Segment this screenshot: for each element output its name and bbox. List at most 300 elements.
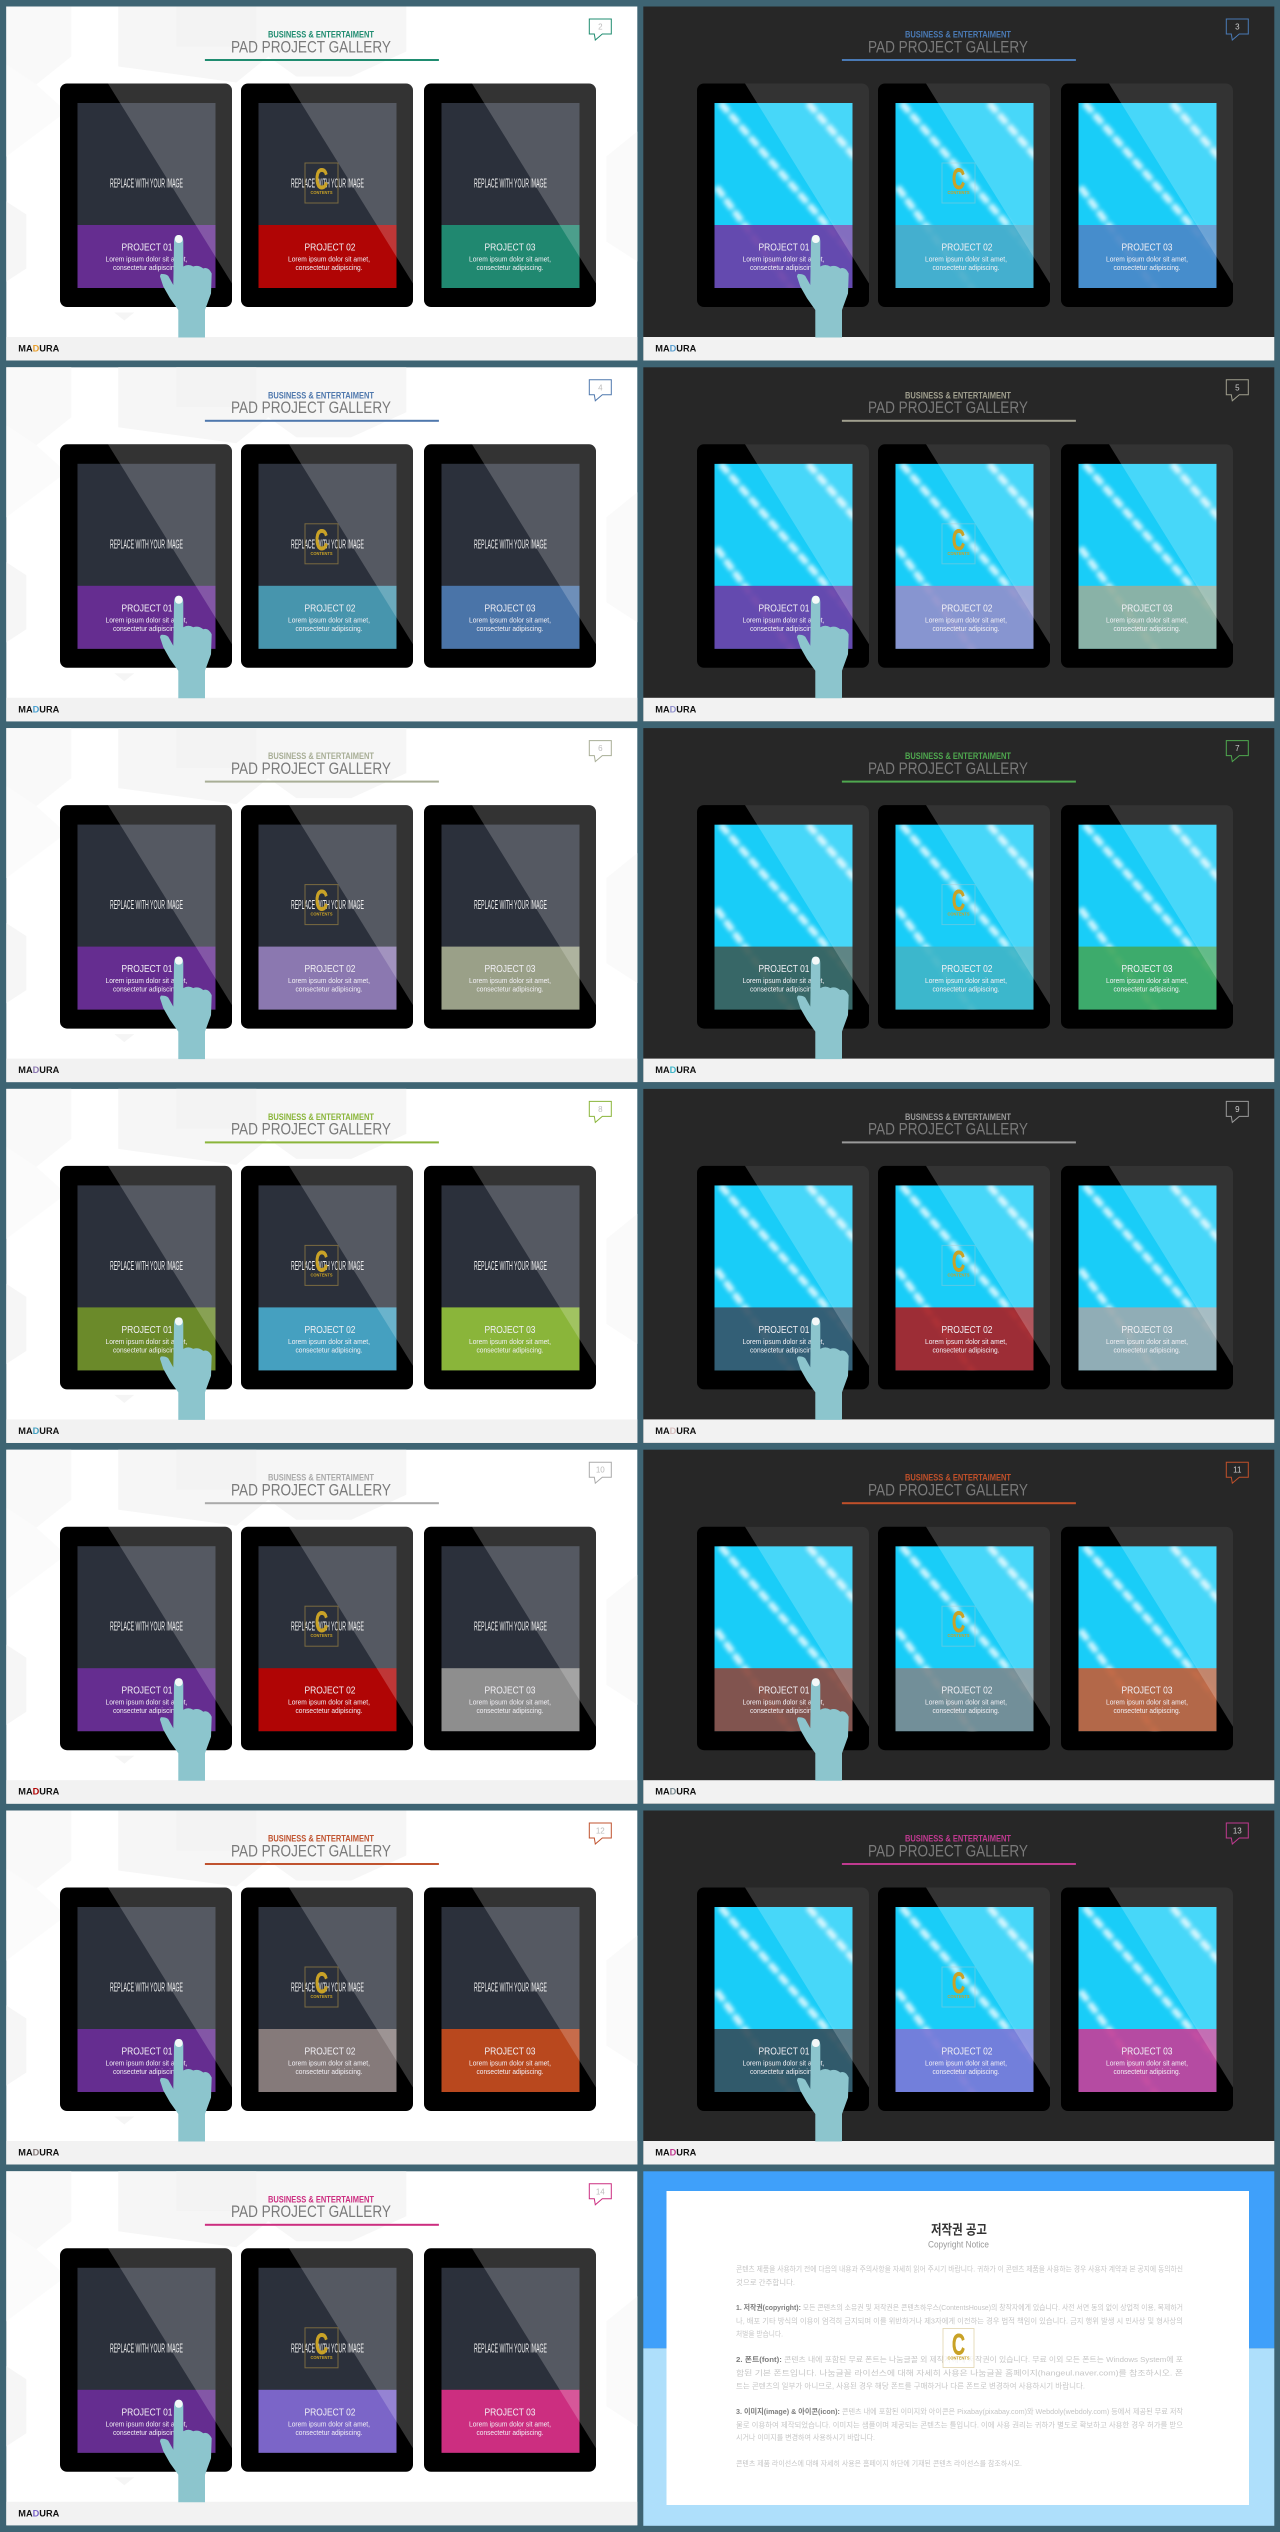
tablet: project 03: PROJECT 03 xyxy=(485,2046,536,2058)
icon: page number bubble xyxy=(589,19,611,40)
notice body text: 1. 저작권(copyright): 모든 콘텐츠의 소유권 및 저작권은 콘텐츠하우스(ContentsHouse)의 창작자에게 있습니다. 사전 서면 동의 없이 상업적 이용, 복제하거 xyxy=(736,2302,1183,2312)
tablet: project 01 xyxy=(697,1888,944,2111)
heading: PAD PROJECT GALLERY xyxy=(868,38,1028,56)
tablet: project 02: C xyxy=(952,1245,965,1278)
icon: page number bubble: 12 xyxy=(596,1826,605,1836)
tablet: project 02: CONTENTS xyxy=(947,912,969,917)
tablet: project 02: C xyxy=(315,2328,328,2361)
tablet: project 02: PROJECT 02 xyxy=(304,2046,356,2058)
tablet: project 01: REPLACE WITH YOUR IMAGE xyxy=(110,898,183,912)
heading: PAD PROJECT GALLERY xyxy=(231,399,391,417)
tablet: project 02: C xyxy=(315,524,328,557)
tablet: project 01: Lorem ipsum dolor sit amet, xyxy=(106,976,188,985)
tablet: project 02: Lorem ipsum dolor sit amet, xyxy=(925,976,1007,985)
tablet: project 02: CONTENTS xyxy=(310,1272,332,1277)
tablet: project 01: consectetur adipiscing. xyxy=(113,985,180,994)
tablet: project 03 xyxy=(424,805,596,1029)
tablet: project 02 xyxy=(241,2248,413,2472)
tablet: project 03: consectetur adipiscing. xyxy=(1114,1706,1180,1715)
tablet: project 02: C xyxy=(952,1967,965,2000)
footer logo: MADURA xyxy=(18,1426,59,1437)
tablet: project 03: PROJECT 03 xyxy=(1122,1685,1173,1697)
notice body text: 3. 이미지(image) & 아이콘(icon): 콘텐츠 내에 포함된 이미지와 아이콘은 Pixabay(pixabay.com)와 Webdoly(webdoly.com) 등에서 제공된 무료 저작 xyxy=(736,2406,1183,2416)
heading: PAD PROJECT GALLERY xyxy=(231,38,391,56)
tablet: project 02: Lorem ipsum dolor sit amet, xyxy=(288,615,370,624)
heading: BUSINESS & ENTERTAIMENT xyxy=(268,390,375,400)
heading xyxy=(842,390,1076,422)
tablet: project 03: Lorem ipsum dolor sit amet, xyxy=(469,615,551,624)
tablet: project 01: Lorem ipsum dolor sit amet, xyxy=(742,976,824,985)
tablet: project 02: Lorem ipsum dolor sit amet, xyxy=(288,2419,370,2428)
tablet: project 02: REPLACE WITH YOUR IMAGE xyxy=(291,1259,364,1273)
tablet: project 01: PROJECT 01 xyxy=(758,2046,810,2058)
tablet: project 02: consectetur adipiscing. xyxy=(932,985,999,994)
tablet: project 02: Lorem ipsum dolor sit amet, xyxy=(288,254,370,264)
tablet: project 03: Lorem ipsum dolor sit amet, xyxy=(469,1698,551,1707)
tablet: project 02: Lorem ipsum dolor sit amet, xyxy=(288,976,370,985)
tablet: project 02: C xyxy=(952,524,965,557)
heading: BUSINESS & ENTERTAIMENT xyxy=(905,1834,1012,1844)
tablet: project 02: PROJECT 02 xyxy=(941,1685,993,1697)
icon: page number bubble xyxy=(589,380,611,401)
icon: page number bubble xyxy=(1226,1462,1248,1483)
tablet: project 02: CONTENTS xyxy=(947,1994,969,1999)
tablet: project 01: REPLACE WITH YOUR IMAGE xyxy=(110,1259,183,1273)
tablet: project 02: PROJECT 02 xyxy=(304,963,356,975)
icon: hand xyxy=(797,1317,849,1420)
tablet: project 02: PROJECT 02 xyxy=(304,602,356,614)
tablet: project 02 xyxy=(241,1527,413,1750)
icon: hand xyxy=(797,1678,849,1781)
heading xyxy=(205,1834,439,1865)
notice card xyxy=(666,2191,1249,2505)
tablet: project 01: REPLACE WITH YOUR IMAGE xyxy=(110,1620,183,1634)
heading: BUSINESS & ENTERTAIMENT xyxy=(268,751,375,761)
tablet: project 01: consectetur adipiscing. xyxy=(113,263,180,272)
tablet: project 03: Lorem ipsum dolor sit amet, xyxy=(469,2419,551,2428)
heading: BUSINESS & ENTERTAIMENT xyxy=(268,1112,375,1122)
tablet: project 03: REPLACE WITH YOUR IMAGE xyxy=(474,1980,547,1994)
tablet: project 03: Lorem ipsum dolor sit amet, xyxy=(469,976,551,985)
tablet: project 02: PROJECT 02 xyxy=(304,242,356,254)
tablet: project 02 xyxy=(241,444,413,668)
icon: hand xyxy=(160,1317,212,1420)
heading: PAD PROJECT GALLERY xyxy=(231,2203,391,2221)
icon: page number bubble xyxy=(1226,380,1248,401)
icon: page number bubble xyxy=(1226,741,1248,762)
tablet: project 03: PROJECT 03 xyxy=(485,1685,536,1697)
tablet: project 02: consectetur adipiscing. xyxy=(295,1706,362,1715)
tablet: project 02: C xyxy=(952,885,965,918)
tablet: project 01: consectetur adipiscing. xyxy=(113,2067,180,2076)
tablet: project 01: consectetur adipiscing. xyxy=(750,263,817,272)
tablet: project 02: CONTENTS xyxy=(310,1633,332,1638)
tablet: project 03: consectetur adipiscing. xyxy=(1114,985,1180,994)
tablet: project 01: Lorem ipsum dolor sit amet, xyxy=(106,2058,188,2068)
tablet: project 02: consectetur adipiscing. xyxy=(295,2067,362,2076)
icon: page number bubble: 3 xyxy=(1235,22,1240,32)
heading: BUSINESS & ENTERTAIMENT xyxy=(905,1112,1012,1122)
tablet: project 01 xyxy=(697,444,944,668)
tablet: project 01: consectetur adipiscing. xyxy=(750,624,817,633)
tablet: project 02: CONTENTS xyxy=(310,551,332,556)
tablet: project 01 xyxy=(697,805,944,1029)
tablet: project 01: consectetur adipiscing. xyxy=(750,1345,817,1354)
footer logo: MADURA xyxy=(655,1426,696,1437)
tablet: project 03: consectetur adipiscing. xyxy=(477,624,544,633)
tablet: project 02: consectetur adipiscing. xyxy=(295,1345,362,1354)
tablet: project 02: CONTENTS xyxy=(947,1272,969,1277)
notice body text xyxy=(736,2264,1183,2468)
icon: page number bubble: 4 xyxy=(598,383,603,392)
tablet: project 01: PROJECT 01 xyxy=(758,242,810,254)
heading: PAD PROJECT GALLERY xyxy=(231,760,391,778)
tablet: project 02: REPLACE WITH YOUR IMAGE xyxy=(291,1620,364,1634)
tablet: project 02: REPLACE WITH YOUR IMAGE xyxy=(291,1980,364,1994)
tablet: project 01: Lorem ipsum dolor sit amet, xyxy=(106,1698,188,1707)
footer logo: MADURA xyxy=(18,1065,59,1076)
tablet: project 01: Lorem ipsum dolor sit amet, xyxy=(106,1337,188,1346)
tablet: project 03 xyxy=(1061,1527,1280,1750)
tablet: project 02 xyxy=(241,84,413,307)
tablet: project 03: Lorem ipsum dolor sit amet, xyxy=(1106,1337,1188,1346)
icon: page number bubble: 13 xyxy=(1233,1826,1242,1836)
tablet: project 02 xyxy=(878,1527,1126,1750)
heading xyxy=(205,2194,439,2226)
tablet: project 03: PROJECT 03 xyxy=(1122,2046,1173,2058)
tablet: project 01 xyxy=(60,1166,232,1389)
tablet: project 03: consectetur adipiscing. xyxy=(477,1345,544,1354)
tablet: project 03: PROJECT 03 xyxy=(485,1324,536,1336)
panel: slide 7 xyxy=(643,728,1280,1082)
tablet: project 02 xyxy=(878,444,1126,668)
tablet: project 03: REPLACE WITH YOUR IMAGE xyxy=(474,2341,547,2355)
panel: slide 12 xyxy=(6,1810,637,2164)
tablet: project 01: consectetur adipiscing. xyxy=(113,624,180,633)
notice body text: 것으로 간주합니다. xyxy=(736,2277,795,2287)
tablet: project 03: consectetur adipiscing. xyxy=(477,985,544,994)
tablet: project 02: consectetur adipiscing. xyxy=(932,2067,999,2076)
heading xyxy=(205,1112,439,1143)
heading: PAD PROJECT GALLERY xyxy=(868,1481,1028,1499)
heading: BUSINESS & ENTERTAIMENT xyxy=(905,390,1012,400)
tablet: project 03 xyxy=(424,2248,596,2472)
tablet: project 02 xyxy=(241,1888,413,2111)
tablet: project 03: REPLACE WITH YOUR IMAGE xyxy=(474,1259,547,1273)
heading: BUSINESS & ENTERTAIMENT xyxy=(268,1834,375,1844)
tablet: project 02: consectetur adipiscing. xyxy=(295,985,362,994)
icon: page number bubble xyxy=(589,1823,611,1844)
tablet: project 03: consectetur adipiscing. xyxy=(1114,2067,1180,2076)
tablet: project 02: C xyxy=(315,1245,328,1278)
heading: PAD PROJECT GALLERY xyxy=(868,1842,1028,1860)
tablet: project 02 xyxy=(878,805,1126,1029)
icon: hand xyxy=(160,957,212,1059)
tablet: project 02: consectetur adipiscing. xyxy=(295,263,362,272)
tablet: project 03: Lorem ipsum dolor sit amet, xyxy=(469,1337,551,1346)
icon: page number bubble: 6 xyxy=(598,744,603,753)
tablet: project 02: C xyxy=(952,163,965,196)
tablet: project 03: Lorem ipsum dolor sit amet, xyxy=(469,2058,551,2068)
logo: contents stamp xyxy=(943,2328,974,2368)
tablet: project 01: REPLACE WITH YOUR IMAGE xyxy=(110,176,183,190)
icon: hand xyxy=(160,1678,212,1781)
footer logo: MADURA xyxy=(655,1065,696,1076)
tablet: project 01: Lorem ipsum dolor sit amet, xyxy=(742,1337,824,1346)
tablet: project 01: consectetur adipiscing. xyxy=(750,1706,817,1715)
tablet: project 02: C xyxy=(315,163,328,196)
tablet: project 03: Lorem ipsum dolor sit amet, xyxy=(1106,615,1188,624)
tablet: project 01: REPLACE WITH YOUR IMAGE xyxy=(110,537,183,551)
panel: slide 14 xyxy=(6,2171,637,2525)
heading: PAD PROJECT GALLERY xyxy=(868,1121,1028,1139)
heading: PAD PROJECT GALLERY xyxy=(231,1842,391,1860)
heading xyxy=(842,1834,1076,1865)
tablet: project 02: Lorem ipsum dolor sit amet, xyxy=(288,1698,370,1707)
tablet: project 01 xyxy=(697,1166,944,1389)
panel: slide 5 xyxy=(643,367,1280,721)
heading: BUSINESS & ENTERTAIMENT xyxy=(268,1473,375,1483)
tablet: project 01: REPLACE WITH YOUR IMAGE xyxy=(110,1980,183,1994)
tablet: project 01 xyxy=(697,1527,944,1750)
tablet: project 02 xyxy=(241,805,413,1029)
tablet: project 03: PROJECT 03 xyxy=(485,602,536,614)
tablet: project 03 xyxy=(424,1888,596,2111)
icon: page number bubble xyxy=(589,2184,611,2205)
icon: page number bubble: 11 xyxy=(1233,1466,1242,1475)
icon: hand xyxy=(160,2039,212,2142)
footer logo: MADURA xyxy=(655,704,696,715)
tablet: project 02 xyxy=(878,84,1126,307)
tablet: project 02: CONTENTS xyxy=(310,1994,332,1999)
heading: PAD PROJECT GALLERY xyxy=(231,1481,391,1499)
tablet: project 01: PROJECT 01 xyxy=(758,1685,810,1697)
tablet: project 01: consectetur adipiscing. xyxy=(750,985,817,994)
tablet: project 02: C xyxy=(952,1606,965,1639)
icon: page number bubble: 8 xyxy=(598,1105,603,1114)
heading xyxy=(205,30,439,61)
heading: PAD PROJECT GALLERY xyxy=(868,760,1028,778)
tablet: project 02: PROJECT 02 xyxy=(304,1685,356,1697)
tablet: project 01 xyxy=(60,805,232,1029)
tablet: project 03 xyxy=(424,1166,596,1389)
heading: BUSINESS & ENTERTAIMENT xyxy=(268,2194,375,2204)
panel: slide 13 xyxy=(643,1810,1280,2164)
icon: hand xyxy=(797,235,849,338)
notice body text: 시거나 이미지를 변경하여 사용하시기 바랍니다. xyxy=(736,2432,875,2442)
tablet: project 02 xyxy=(878,1888,1126,2111)
notice body text: 콘텐츠 제품 라이선스에 대해 자세히 사용은 홈페이지 하단에 기재된 콘텐츠 라이선스를 참조하시오. xyxy=(736,2458,1022,2468)
icon: page number bubble: 14 xyxy=(596,2187,605,2196)
tablet: project 03: Lorem ipsum dolor sit amet, xyxy=(1106,1698,1188,1707)
icon: hand xyxy=(160,235,212,338)
tablet: project 01 xyxy=(60,444,232,668)
heading: BUSINESS & ENTERTAIMENT xyxy=(905,751,1012,761)
icon: page number bubble: 5 xyxy=(1235,383,1240,392)
tablet: project 01 xyxy=(60,2248,232,2472)
footer logo: MADURA xyxy=(18,1787,59,1798)
tablet: project 02: CONTENTS xyxy=(947,190,969,195)
tablet: project 02: CONTENTS xyxy=(310,912,332,917)
heading xyxy=(842,30,1076,61)
notice body text: 콘텐츠 제품을 사용하기 전에 다음의 내용과 주의사항을 자세히 읽어 주시기 바랍니다. 귀하가 이 콘텐츠 제품을 사용하는 경우 사용자 계약과 본 공지에 동의하신 xyxy=(736,2264,1183,2274)
tablet: project 03: consectetur adipiscing. xyxy=(1114,624,1180,633)
tablet: project 03: consectetur adipiscing. xyxy=(477,263,544,272)
tablet: project 01: PROJECT 01 xyxy=(122,963,173,975)
tablet: project 01: Lorem ipsum dolor sit amet, xyxy=(106,615,188,624)
tablet: project 02: CONTENTS xyxy=(310,2355,332,2360)
tablet: project 02: PROJECT 02 xyxy=(941,602,993,614)
tablet: project 02: C xyxy=(315,1967,328,2000)
tablet: project 03 xyxy=(424,1527,596,1750)
tablet: project 02: consectetur adipiscing. xyxy=(932,1706,999,1715)
heading xyxy=(205,1473,439,1504)
tablet: project 02: CONTENTS xyxy=(310,190,332,195)
notice subtitle: Copyright Notice xyxy=(928,2240,989,2250)
footer logo: MADURA xyxy=(655,2148,696,2158)
footer logo: MADURA xyxy=(18,2148,59,2158)
tablet: project 01: PROJECT 01 xyxy=(122,1685,173,1697)
tablet: project 01: REPLACE WITH YOUR IMAGE xyxy=(110,2341,183,2355)
tablet: project 03: Lorem ipsum dolor sit amet, xyxy=(1106,2058,1188,2068)
tablet: project 01: PROJECT 01 xyxy=(758,602,810,614)
panel: copyright notice xyxy=(643,2171,1274,2526)
tablet: project 01: PROJECT 01 xyxy=(758,1324,810,1336)
panel: slide 11 xyxy=(643,1450,1280,1804)
icon: hand xyxy=(797,596,849,698)
tablet: project 01: PROJECT 01 xyxy=(758,963,810,975)
tablet: project 02: PROJECT 02 xyxy=(941,963,993,975)
tablet: project 03: PROJECT 03 xyxy=(485,2406,536,2418)
tablet: project 01: PROJECT 01 xyxy=(122,2406,173,2418)
tablet: project 01: Lorem ipsum dolor sit amet, xyxy=(742,254,824,264)
panel: slide 4 xyxy=(6,367,637,721)
footer logo: MADURA xyxy=(655,344,696,354)
tablet: project 02: REPLACE WITH YOUR IMAGE xyxy=(291,898,364,912)
heading xyxy=(205,751,439,783)
tablet: project 02: C xyxy=(315,1606,328,1639)
tablet: project 01: Lorem ipsum dolor sit amet, xyxy=(742,1698,824,1707)
tablet: project 03: consectetur adipiscing. xyxy=(477,2428,544,2437)
tablet: project 01: consectetur adipiscing. xyxy=(113,2428,180,2437)
tablet: project 01: Lorem ipsum dolor sit amet, xyxy=(742,615,824,624)
tablet: project 03: PROJECT 03 xyxy=(485,963,536,975)
tablet: project 03 xyxy=(424,84,596,307)
tablet: project 03: PROJECT 03 xyxy=(1122,602,1173,614)
tablet: project 02: consectetur adipiscing. xyxy=(932,624,999,633)
icon: page number bubble xyxy=(1226,1101,1248,1122)
tablet: project 02: PROJECT 02 xyxy=(304,2406,356,2418)
tablet: project 03: Lorem ipsum dolor sit amet, xyxy=(1106,976,1188,985)
icon: page number bubble: 10 xyxy=(596,1466,605,1475)
tablet: project 02: consectetur adipiscing. xyxy=(295,624,362,633)
tablet: project 03: PROJECT 03 xyxy=(485,242,536,254)
tablet: project 01 xyxy=(697,84,944,307)
tablet: project 02: Lorem ipsum dolor sit amet, xyxy=(925,1698,1007,1707)
tablet: project 01: PROJECT 01 xyxy=(122,242,173,254)
tablet: project 03: PROJECT 03 xyxy=(1122,963,1173,975)
heading xyxy=(842,1473,1076,1504)
tablet: project 03: REPLACE WITH YOUR IMAGE xyxy=(474,537,547,551)
tablet: project 02: PROJECT 02 xyxy=(304,1324,356,1336)
tablet: project 03: consectetur adipiscing. xyxy=(477,2067,544,2076)
tablet: project 03: consectetur adipiscing. xyxy=(1114,1345,1180,1354)
tablet: project 01 xyxy=(60,1527,232,1750)
icon: page number bubble: 7 xyxy=(1235,744,1240,753)
tablet: project 02 xyxy=(878,1166,1126,1389)
tablet: project 03: Lorem ipsum dolor sit amet, xyxy=(1106,254,1188,264)
tablet: project 02: Lorem ipsum dolor sit amet, xyxy=(288,1337,370,1346)
icon: page number bubble xyxy=(589,1462,611,1483)
tablet: project 03 xyxy=(424,444,596,668)
tablet: project 02: REPLACE WITH YOUR IMAGE xyxy=(291,176,364,190)
panel: slide 6 xyxy=(6,728,637,1082)
tablet: project 03: Lorem ipsum dolor sit amet, xyxy=(469,254,551,264)
tablet: project 01 xyxy=(60,84,232,307)
tablet: project 01: Lorem ipsum dolor sit amet, xyxy=(106,254,188,264)
tablet: project 02: consectetur adipiscing. xyxy=(932,1345,999,1354)
panel: slide 9 xyxy=(643,1089,1280,1443)
heading: BUSINESS & ENTERTAIMENT xyxy=(905,30,1012,40)
icon: hand xyxy=(797,957,849,1059)
tablet: project 03 xyxy=(1061,1888,1280,2111)
heading xyxy=(842,751,1076,783)
heading: BUSINESS & ENTERTAIMENT xyxy=(905,1473,1012,1483)
tablet: project 02: PROJECT 02 xyxy=(941,1324,993,1336)
icon: page number bubble xyxy=(1226,1823,1248,1844)
tablet: project 01: PROJECT 01 xyxy=(122,602,173,614)
panel: slide 8 xyxy=(6,1089,637,1443)
notice body text: 나, 배포 기타 방식의 이용이 엄격히 금지되며 이를 위반하거나 제3자에게 이전하는 경우 법적 책임이 있습니다. 금지 행위 발생 시 민사상 및 형사상의 xyxy=(736,2315,1183,2325)
notice body text: 함된 기본 폰트입니다. 나눔글꼴 라이선스에 대해 자세히 사용은 나눔글꼴 홈페이지(hangeul.naver.com)를 참조하시오. 폰 xyxy=(736,2367,1183,2377)
footer logo: MADURA xyxy=(18,2508,59,2519)
icon: page number bubble xyxy=(1226,19,1248,40)
panel: slide 10 xyxy=(6,1450,637,1804)
heading: PAD PROJECT GALLERY xyxy=(868,399,1028,417)
tablet: project 03: PROJECT 03 xyxy=(1122,242,1173,254)
heading xyxy=(842,1112,1076,1143)
logo: contents stamp: CONTENTS xyxy=(948,2356,970,2360)
tablet: project 01: PROJECT 01 xyxy=(122,2046,173,2058)
icon: page number bubble: 9 xyxy=(1235,1105,1240,1114)
tablet: project 02: CONTENTS xyxy=(947,551,969,556)
tablet: project 01: Lorem ipsum dolor sit amet, xyxy=(742,2058,824,2068)
tablet: project 02: Lorem ipsum dolor sit amet, xyxy=(925,615,1007,624)
tablet: project 02: PROJECT 02 xyxy=(941,2046,993,2058)
tablet: project 02: C xyxy=(315,885,328,918)
tablet: project 03: PROJECT 03 xyxy=(1122,1324,1173,1336)
tablet: project 01: consectetur adipiscing. xyxy=(113,1345,180,1354)
tablet: project 02: CONTENTS xyxy=(947,1633,969,1638)
tablet: project 03: REPLACE WITH YOUR IMAGE xyxy=(474,898,547,912)
notice body text: 2. 폰트(font): 콘텐츠 내에 포함된 무료 폰트는 나눔글꼴 외 제작자에게 저작권이 있습니다. 무료 이외 모든 폰트는 Windows System에 포 xyxy=(736,2354,1183,2364)
tablet: project 03 xyxy=(1061,444,1280,668)
tablet: project 02 xyxy=(241,1166,413,1389)
tablet: project 02: consectetur adipiscing. xyxy=(932,263,999,272)
panel: slide 2 xyxy=(6,6,637,360)
notice body text: 물로 이용하여 제작되었습니다. 이미지는 샘플이며 제공되는 콘텐츠는 틀입니다. 이에 사용 권리는 귀하가 별도로 확보하고 사용한 경우 허가를 받으 xyxy=(736,2419,1183,2429)
icon: hand xyxy=(797,2039,849,2142)
tablet: project 02: Lorem ipsum dolor sit amet, xyxy=(925,2058,1007,2068)
heading xyxy=(205,390,439,422)
tablet: project 01 xyxy=(60,1888,232,2111)
icon: page number bubble xyxy=(589,1101,611,1122)
footer logo: MADURA xyxy=(655,1787,696,1798)
tablet: project 03: consectetur adipiscing. xyxy=(1114,263,1180,272)
tablet: project 01: Lorem ipsum dolor sit amet, xyxy=(106,2419,188,2428)
icon: page number bubble: 2 xyxy=(598,22,603,32)
tablet: project 03: consectetur adipiscing. xyxy=(477,1706,544,1715)
